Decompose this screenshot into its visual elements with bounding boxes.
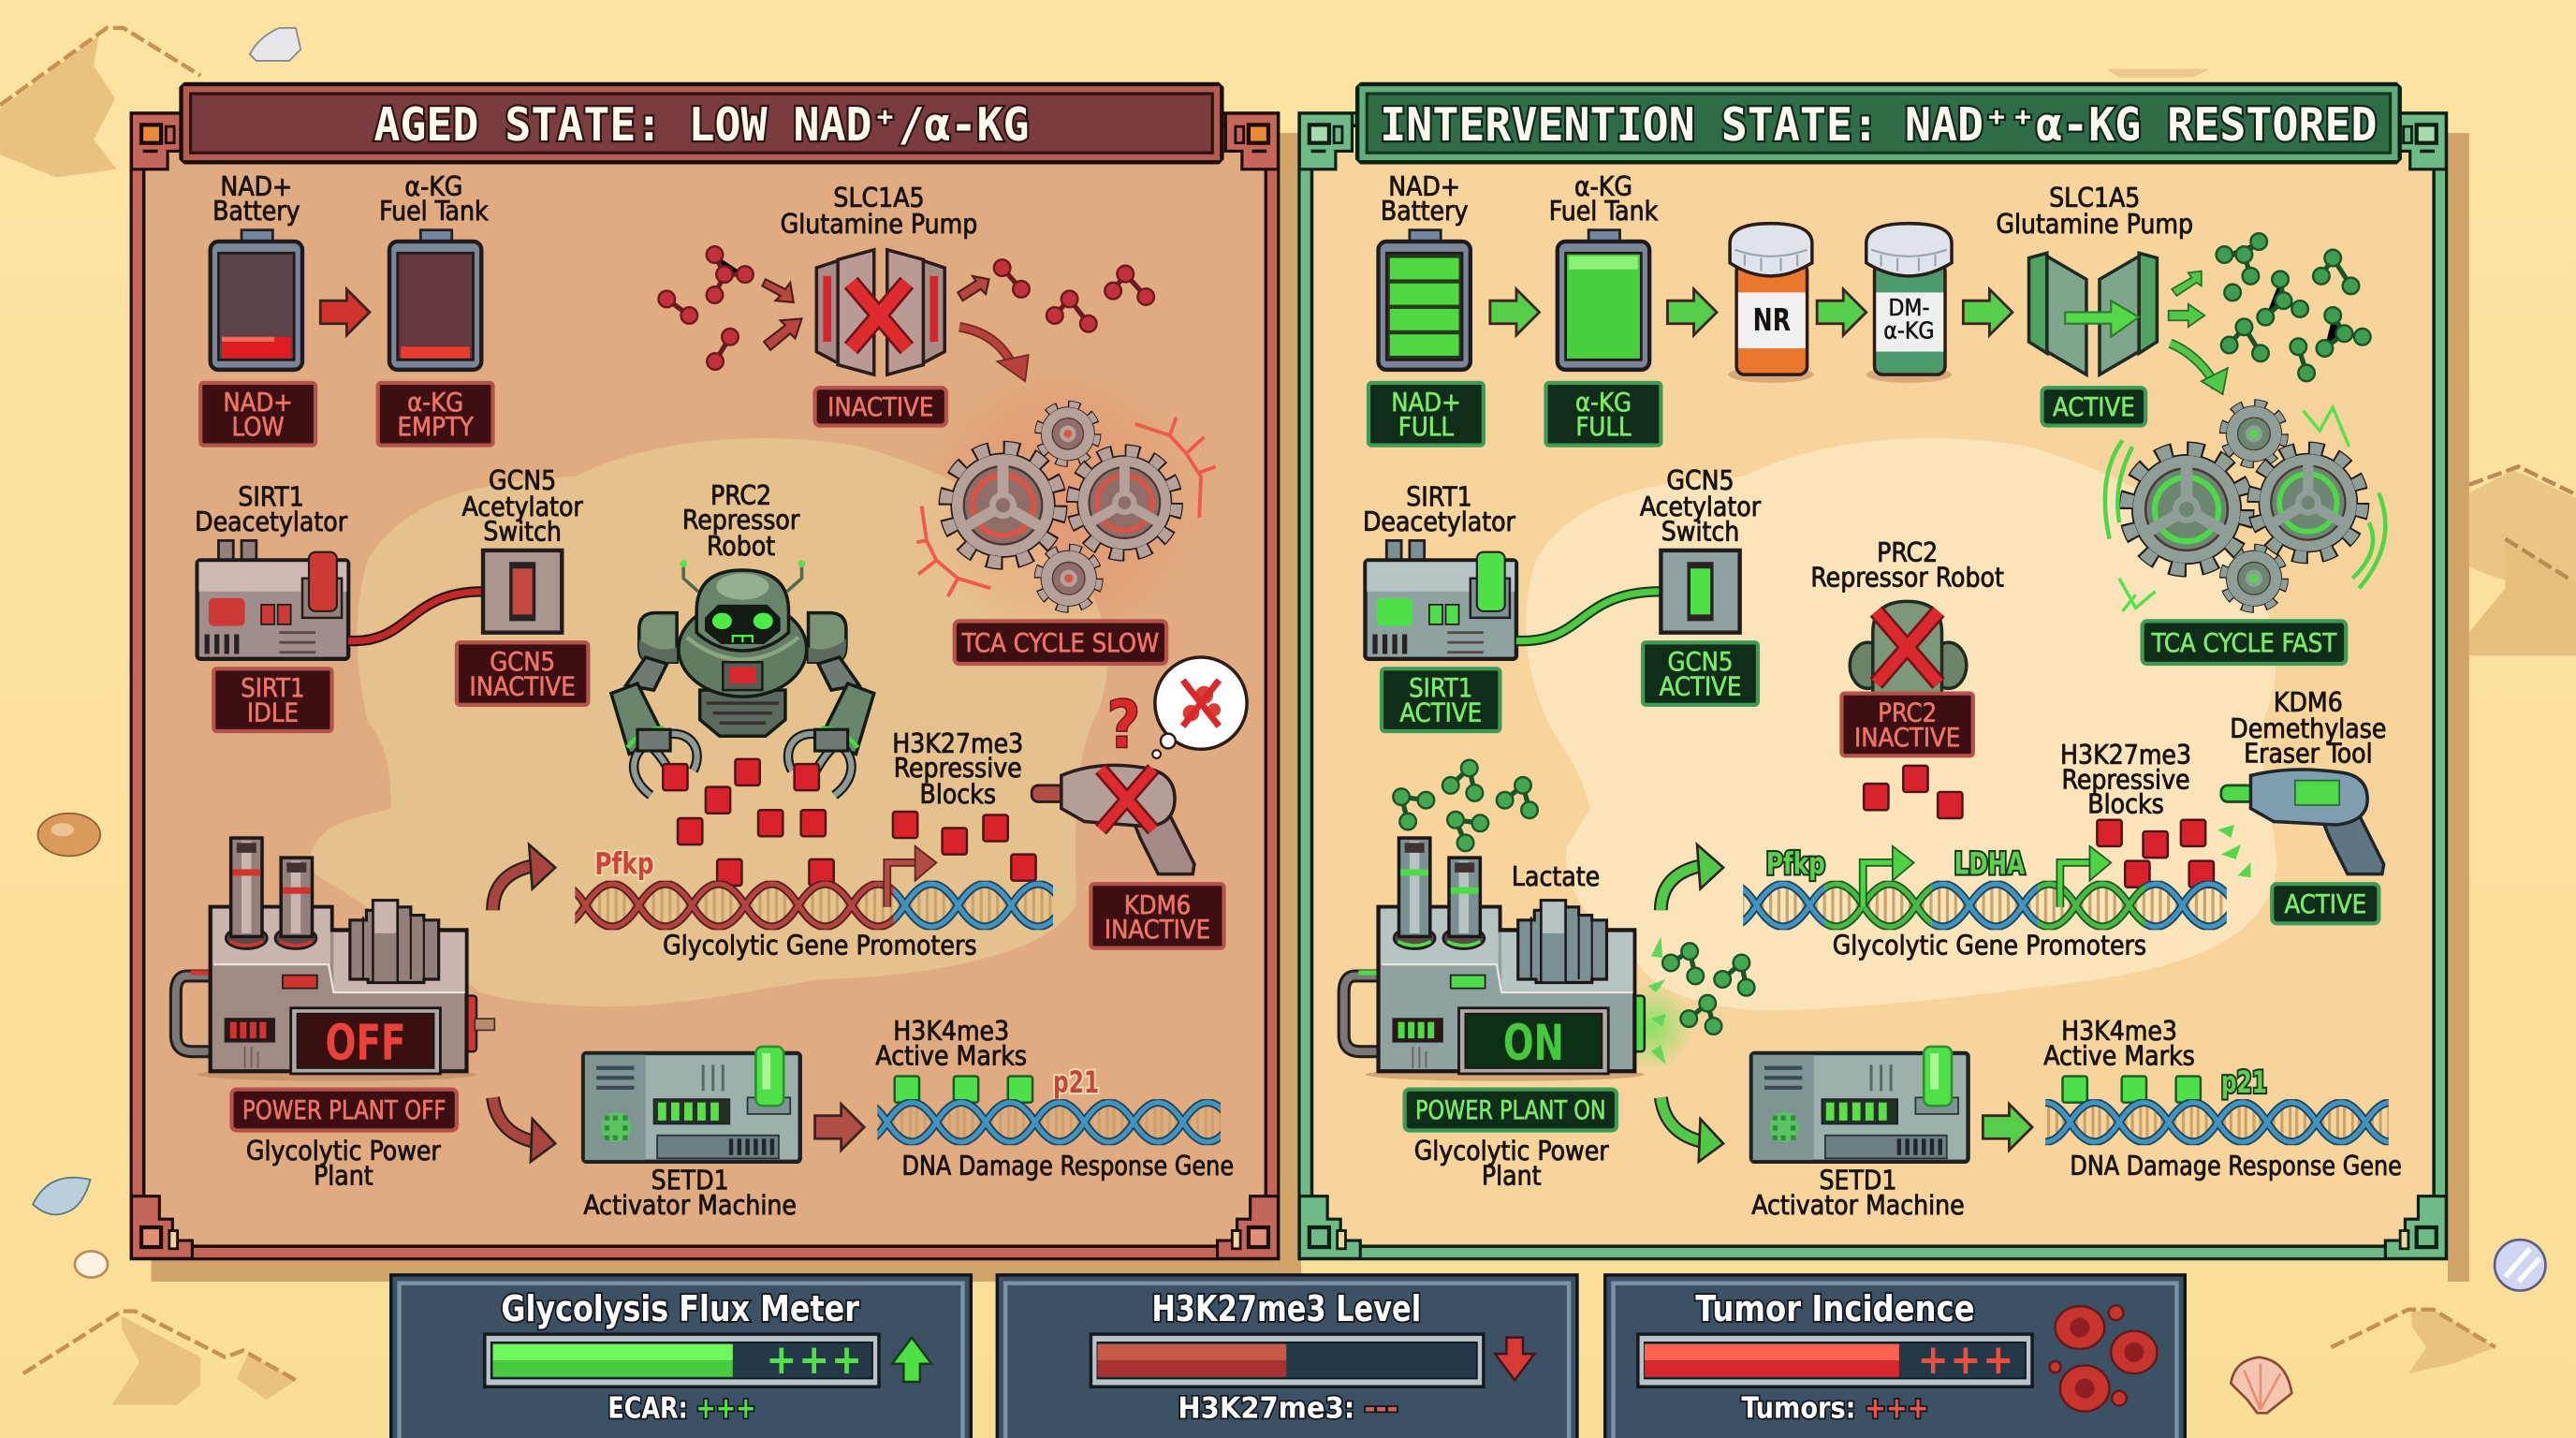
H3K4me3 marks and DNA damage gene, intervention [2043, 1016, 2402, 1181]
H3K27me3 repressive blocks: Repressive [894, 753, 1022, 784]
title banner: intervention state: INTERVENTION STATE: NAD⁺⁺α-KG RESTORED [1380, 97, 2378, 152]
NAD+ battery low: NAD+ [220, 171, 292, 202]
badge: TCA CYCLE SLOW: TCA CYCLE SLOW [961, 629, 1159, 658]
readout: tumor incidence [1605, 1275, 2185, 1438]
arrow: pump to gears, green [2170, 344, 2228, 394]
readout: glycolysis flux meter: Glycolysis Flux Meter [501, 1288, 860, 1330]
SLC1A5 glutamine pump label, active [1996, 183, 2193, 240]
readout: tumor incidence: +++ [1918, 1336, 2015, 1384]
lactate label: Lactate [1512, 861, 1600, 892]
SLC1A5 glutamine pump label, active: Glutamine Pump [1996, 209, 2193, 240]
NAD+ battery low: Battery [212, 196, 300, 227]
alpha-KG tank empty: Fuel Tank [379, 196, 489, 227]
H3K4me3 marks and DNA damage gene, intervention: p21 [2221, 1066, 2267, 1100]
readout: tumor incidence: Tumor Incidence [1695, 1288, 1975, 1330]
badge: NAD+ FULL [1368, 383, 1484, 446]
SIRT1 deacetylator active: Deacetylator [1363, 506, 1516, 537]
red glutamine molecules [658, 246, 1154, 370]
H3K27me3 blocks, intervention [2060, 740, 2214, 888]
icon: DM-alpha-KG bottle: DM- [1888, 294, 1929, 321]
GCN5 acetylator switch on: Switch [1661, 516, 1739, 547]
GCN5 acetylator switch on: Acetylator [1640, 492, 1762, 522]
wire: SIRT1 to GCN5 [348, 592, 483, 641]
icon: KDM6 eraser tool crossed [1032, 765, 1194, 874]
label: glycolytic power plant: Plant [314, 1160, 373, 1191]
SLC1A5 glutamine pump label, active: SLC1A5 [2049, 183, 2140, 213]
H3K4me3 marks and DNA damage gene, intervention: Active Marks [2043, 1040, 2195, 1071]
title banner: aged state: AGED STATE: LOW NAD⁺/α-KG [373, 97, 1030, 152]
SIRT1 deacetylator idle: SIRT1 [238, 482, 304, 513]
icon: DM-alpha-KG bottle [1866, 224, 1952, 383]
glycolytic power plant off [176, 838, 494, 1081]
SETD1 activator machine, intervention: SETD1 [1820, 1166, 1896, 1196]
icon: DM-alpha-KG bottle: α-KG [1883, 317, 1934, 345]
badge: SIRT1 IDLE: IDLE [247, 698, 299, 727]
small output arrows [2169, 271, 2204, 327]
SIRT1 deacetylator idle: Deacetylator [195, 506, 348, 537]
badge: GCN5 INACTIVE: INACTIVE [470, 672, 576, 701]
arrow: NAD+ to alpha-KG, intervention [1490, 289, 1540, 335]
H3K4me3 marks and DNA damage gene: H3K4me3 [893, 1016, 1009, 1047]
badge: TCA CYCLE FAST: TCA CYCLE FAST [2151, 629, 2337, 658]
PRC2 repressor robot [611, 480, 874, 795]
label: glycolytic power plant, intervention: Glycolytic Power [1414, 1136, 1609, 1167]
SETD1 activator machine [583, 1047, 800, 1221]
badge: alpha-KG EMPTY: α-KG [407, 389, 463, 418]
SLC1A5 glutamine pump label: SLC1A5 [833, 183, 925, 213]
lactate molecules beside plant [1608, 936, 1754, 1070]
arrow: plant to SETD1 [493, 1097, 555, 1162]
glycolytic gene promoter DNA: Pfkp [594, 848, 654, 882]
PRC2 robot deactivated [1810, 537, 2004, 694]
badge: POWER PLANT ON: POWER PLANT ON [1415, 1096, 1606, 1125]
SETD1 activator machine, intervention [1751, 1047, 1969, 1221]
H3K27me3 repressive blocks: H3K27me3 [892, 728, 1023, 759]
wire: SIRT1 to GCN5, green [1516, 592, 1661, 641]
badge: KDM6 INACTIVE: KDM6 [1124, 891, 1191, 920]
glycolytic gene promoter DNA: Glycolytic Gene Promoters [663, 931, 977, 961]
H3K4me3 marks and DNA damage gene: p21 [1053, 1066, 1099, 1100]
NAD+ battery full [1379, 171, 1471, 370]
readout: H3K27me3 level [997, 1275, 1577, 1438]
panel: aged state [131, 82, 1279, 1259]
label: glycolytic power plant: Glycolytic Power [246, 1136, 441, 1167]
SIRT1 deacetylator idle [195, 482, 348, 659]
icon: inactive glutamine pump [816, 250, 944, 374]
label: glycolytic power plant, intervention: Plant [1482, 1160, 1542, 1191]
H3K27me3 blocks, intervention: Blocks [2087, 789, 2164, 820]
SIRT1 deacetylator active: SIRT1 [1406, 482, 1472, 513]
arrow: NR to DM-alpha-KG [1817, 289, 1866, 335]
PRC2 robot deactivated: PRC2 [1877, 537, 1938, 568]
NAD+ battery full: Battery [1381, 196, 1468, 227]
thought bubble with question mark: ? [1106, 687, 1141, 764]
SIRT1 deacetylator active [1363, 482, 1516, 659]
badge: GCN5 INACTIVE: GCN5 [490, 648, 555, 677]
H3K27me3 repressive blocks [663, 728, 1036, 886]
badge: GCN5 ACTIVE: ACTIVE [1660, 672, 1741, 701]
label: glycolytic power plant [246, 1136, 441, 1191]
H3K4me3 marks and DNA damage gene [875, 1016, 1234, 1181]
badge: POWER PLANT OFF: POWER PLANT OFF [242, 1096, 446, 1125]
badge: TCA CYCLE FAST [2143, 621, 2346, 664]
badge: NAD+ LOW: LOW [232, 413, 285, 442]
badge: NAD+ FULL: NAD+ [1391, 389, 1461, 418]
GCN5 acetylator switch: GCN5 [489, 465, 556, 496]
readout: H3K27me3 level: H3K27me3: --- [1178, 1392, 1398, 1426]
title banner: aged state [179, 82, 1224, 165]
H3K27me3 blocks, intervention: H3K27me3 [2060, 740, 2191, 770]
thought bubble with question mark [1106, 657, 1247, 764]
badge: ACTIVE pump: ACTIVE [2053, 393, 2135, 422]
badge: TCA CYCLE SLOW [955, 621, 1166, 664]
badge: SIRT1 ACTIVE [1382, 668, 1500, 731]
icon: NR pill bottle: NR [1753, 301, 1791, 338]
arrow: SETD1 to marks, green [1983, 1104, 2032, 1151]
badge: KDM6 INACTIVE: INACTIVE [1105, 916, 1210, 945]
readout: glycolysis flux meter: ECAR: +++ [607, 1392, 755, 1426]
green glutamine molecules [2217, 233, 2371, 381]
NAD+ battery low [211, 171, 302, 370]
badge: INACTIVE pump: INACTIVE [827, 393, 933, 422]
badge: alpha-KG FULL: α-KG [1575, 389, 1632, 418]
H3K4me3 marks and DNA damage gene: DNA Damage Response Gene [902, 1151, 1234, 1181]
badge: PRC2 INACTIVE: PRC2 [1878, 698, 1937, 727]
arrow: bottle to pump [1963, 289, 2012, 335]
badge: PRC2 INACTIVE: INACTIVE [1854, 724, 1960, 753]
arrow: plant to SETD1, green [1661, 1097, 1723, 1162]
glycolytic power plant on [1344, 838, 1645, 1081]
glycolytic gene promoter DNA, active: LDHA [1954, 848, 2025, 882]
badge: KDM6 ACTIVE: ACTIVE [2284, 890, 2366, 919]
NAD+ battery full: NAD+ [1388, 171, 1460, 202]
KDM6 demethylase eraser tool: Eraser Tool [2244, 738, 2373, 769]
alpha-KG tank full: α-KG [1574, 171, 1632, 202]
arrow: plant to promoters, green [1661, 844, 1723, 910]
badge: GCN5 INACTIVE [457, 642, 588, 705]
H3K4me3 marks and DNA damage gene, intervention: H3K4me3 [2061, 1016, 2177, 1047]
label: glycolytic power plant, intervention [1414, 1136, 1609, 1191]
KDM6 demethylase eraser tool [2217, 687, 2386, 877]
glycolytic power plant off: OFF [326, 1015, 406, 1072]
H3K4me3 marks and DNA damage gene, intervention: DNA Damage Response Gene [2070, 1151, 2402, 1181]
arrow: SETD1 to marks [815, 1104, 864, 1151]
icon: active glutamine pump [2029, 253, 2157, 374]
badge: SIRT1 IDLE [213, 668, 332, 731]
H3K27me3 blocks, intervention: Repressive [2062, 764, 2190, 795]
badge: alpha-KG EMPTY [378, 383, 493, 446]
readout: glycolysis flux meter [391, 1275, 971, 1438]
KDM6 demethylase eraser tool: KDM6 [2274, 687, 2343, 718]
badge: KDM6 ACTIVE [2272, 884, 2378, 923]
badge: SIRT1 IDLE: SIRT1 [241, 674, 305, 703]
GCN5 acetylator switch: Acetylator [462, 492, 583, 522]
displaced red blocks [1864, 766, 1962, 818]
SETD1 activator machine: SETD1 [651, 1166, 729, 1196]
alpha-KG tank empty [379, 171, 489, 370]
badge: ACTIVE pump [2042, 388, 2145, 426]
GCN5 acetylator switch on [1640, 465, 1762, 633]
GCN5 acetylator switch [462, 465, 583, 633]
GCN5 acetylator switch: Switch [483, 516, 562, 547]
panel frame: intervention [1299, 113, 2447, 1259]
small input arrows [762, 276, 989, 350]
panel shadows [152, 133, 2469, 1282]
title banner: intervention state [1355, 82, 2402, 165]
glycolytic gene promoter DNA [575, 846, 1053, 961]
badge: NAD+ FULL: FULL [1398, 413, 1454, 442]
badge: NAD+ LOW: NAD+ [223, 389, 293, 418]
H3K4me3 marks and DNA damage gene: Active Marks [875, 1040, 1027, 1071]
GCN5 acetylator switch on: GCN5 [1666, 465, 1734, 496]
arrow: plant to gene promoters [493, 844, 555, 910]
badge: GCN5 ACTIVE: GCN5 [1668, 648, 1733, 677]
SETD1 activator machine, intervention: Activator Machine [1751, 1190, 1965, 1221]
badge: PRC2 INACTIVE [1841, 694, 1973, 756]
SLC1A5 glutamine pump label: Glutamine Pump [781, 209, 977, 240]
badge: POWER PLANT ON [1405, 1090, 1617, 1130]
PRC2 repressor robot: Robot [707, 531, 775, 562]
arrow: NAD+ to alpha-KG [320, 289, 370, 335]
alpha-KG tank full: Fuel Tank [1549, 196, 1659, 227]
TCA cycle gears slow [916, 372, 1216, 640]
lactate molecules above plant [1393, 760, 1538, 851]
badge: KDM6 INACTIVE [1090, 884, 1224, 948]
readout: H3K27me3 level: H3K27me3 Level [1151, 1288, 1421, 1330]
readout: glycolysis flux meter: +++ [766, 1336, 864, 1384]
panel: intervention state [1299, 82, 2447, 1259]
KDM6 demethylase eraser tool: Demethylase [2230, 713, 2386, 744]
SETD1 activator machine: Activator Machine [583, 1190, 797, 1221]
badge: alpha-KG FULL [1546, 383, 1661, 446]
PRC2 repressor robot: Repressor [682, 505, 800, 536]
icon: NR pill bottle [1728, 224, 1814, 383]
readout: tumor incidence: Tumors: +++ [1741, 1392, 1928, 1426]
arrow: pump to gears [959, 327, 1029, 381]
badge: alpha-KG FULL: FULL [1575, 413, 1632, 442]
badge: GCN5 ACTIVE [1643, 642, 1758, 705]
PRC2 repressor robot: PRC2 [710, 480, 771, 511]
badge: POWER PLANT OFF [232, 1090, 457, 1130]
badge: alpha-KG EMPTY: EMPTY [398, 413, 475, 442]
glycolytic gene promoter DNA, active [1743, 846, 2227, 961]
badge: SIRT1 ACTIVE: ACTIVE [1399, 698, 1482, 727]
glycolytic gene promoter DNA, active: Glycolytic Gene Promoters [1833, 931, 2146, 961]
TCA cycle gears fast [2105, 403, 2385, 611]
glycolytic gene promoter DNA, active: Pfkp [1766, 848, 1825, 882]
alpha-KG tank full [1549, 171, 1659, 370]
panel frame: aged [131, 113, 1279, 1259]
badge: SIRT1 ACTIVE: SIRT1 [1409, 674, 1472, 703]
PRC2 robot deactivated: Repressor Robot [1810, 563, 2004, 594]
arrow: tank to NR [1667, 289, 1717, 335]
badge: NAD+ LOW [200, 383, 315, 446]
H3K27me3 repressive blocks: Blocks [919, 779, 996, 810]
alpha-KG tank empty: α-KG [404, 171, 462, 202]
badge: INACTIVE pump [815, 388, 946, 426]
SLC1A5 glutamine pump label [781, 183, 977, 240]
glycolytic power plant on: ON [1503, 1015, 1564, 1072]
